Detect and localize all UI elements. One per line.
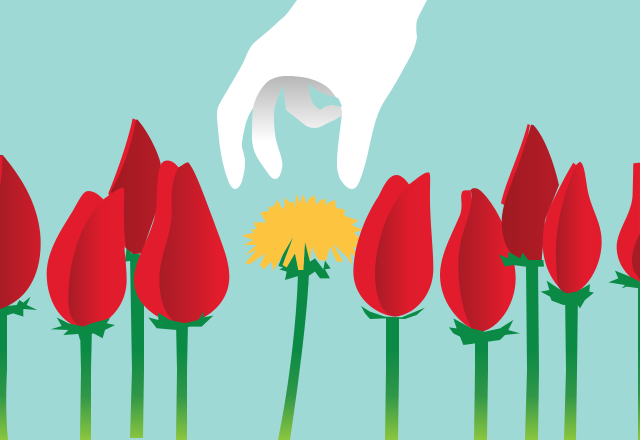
dandelion flower head [242, 194, 363, 271]
tulip 7: back right [499, 124, 559, 440]
tulip 2 [47, 188, 127, 440]
dandelion stem [278, 272, 309, 440]
dandelion sepals [278, 237, 331, 285]
dandelion [242, 194, 363, 440]
tulip 6 [440, 188, 520, 440]
white hand shape [217, 0, 427, 189]
tulip 4 [134, 161, 229, 440]
hand inner fingers in shadow [252, 76, 342, 179]
tulip 1: left edge [0, 155, 41, 440]
tulip 5 [353, 172, 433, 440]
hand [217, 0, 427, 189]
tulip 3: back left [108, 118, 161, 438]
tulip 8 [541, 162, 602, 440]
tulip 9: right edge [608, 163, 640, 440]
gap between fingers [309, 83, 342, 110]
